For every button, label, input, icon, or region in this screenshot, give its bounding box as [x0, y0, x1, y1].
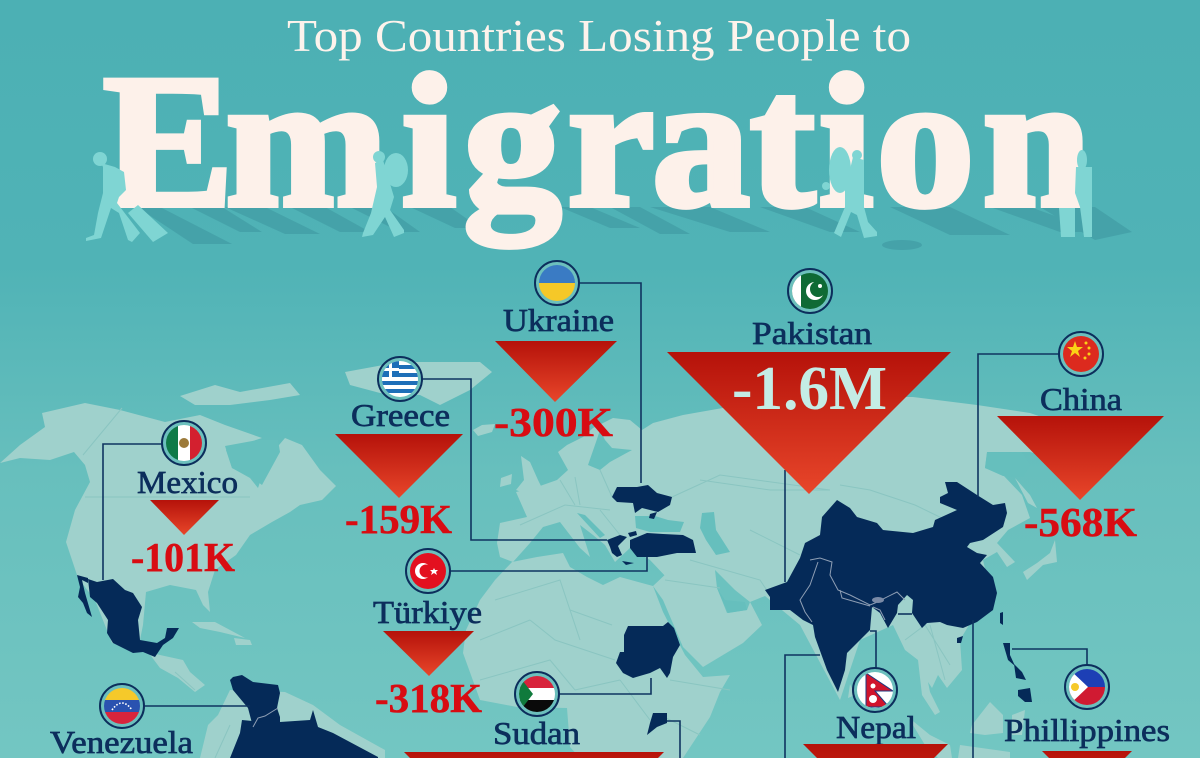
value: Ukraine: -300K: [494, 399, 613, 445]
traveller silhouette with child: [822, 147, 877, 238]
land: Arabia: [653, 570, 762, 667]
land: Eurasia: [497, 397, 1110, 715]
traveller silhouette standing with luggage: [1059, 150, 1092, 237]
value: Mexico: -101K: [131, 534, 235, 580]
flag: Pakistan: [788, 269, 832, 313]
flag: Greece: [378, 357, 422, 401]
land: Africa: [463, 553, 730, 758]
value: Greece: -159K: [345, 496, 452, 542]
label: Sudan: Sudan: [493, 715, 580, 751]
connector: Southeast China: [972, 620, 974, 758]
callout: Phillippines: [1004, 665, 1170, 758]
land: Caribbean and Central America: [148, 622, 252, 692]
connector: Mexico: [103, 444, 162, 580]
traveller silhouette with backpack: [362, 151, 408, 237]
label: Pakistan: Pakistan: [752, 315, 872, 351]
title shadows: [137, 207, 1132, 250]
label: Ukraine: Ukraine: [503, 302, 614, 338]
connector: Philippines: [1012, 649, 1087, 665]
land: Southeast Asia islands: [848, 684, 1025, 758]
value: Pakistan: -1.6M: [732, 355, 887, 423]
connector: Uganda: [667, 721, 680, 758]
label: Phillippines: Phillippines: [1004, 712, 1170, 748]
land: North America: [0, 403, 336, 650]
connector: Greece: [422, 379, 607, 540]
flag: Mexico: [162, 421, 206, 465]
connector: Bangladesh and Myanmar: [898, 613, 912, 615]
value: Türkiye: -318K: [375, 675, 482, 721]
flag: Phillippines: [1065, 665, 1109, 709]
flag: Türkiye: [406, 549, 450, 593]
connector: China: [978, 354, 1059, 497]
connector: Venezuela: [144, 705, 250, 707]
connector: India: [785, 655, 820, 758]
triangle: Mexico: [150, 500, 219, 535]
callout: Venezuela: [50, 684, 193, 758]
flag: Nepal: [853, 668, 897, 712]
Bhutan patch: [872, 597, 884, 603]
highlighted country: Greece: [607, 535, 634, 565]
land: Japan and Sakhalin: [1015, 478, 1057, 580]
label: Türkiye: Türkiye: [373, 594, 482, 630]
connector: Sudan: [559, 678, 651, 694]
triangle: Pakistan: [667, 352, 951, 494]
callout: Nepal: [803, 668, 948, 758]
connector: Türkiye: [450, 557, 647, 571]
triangle: Ukraine: [495, 341, 617, 402]
flag: Sudan: [515, 672, 559, 716]
triangle: Nepal: [803, 744, 948, 758]
label: China: China: [1040, 381, 1122, 417]
highlighted country: Ukraine: [612, 485, 672, 519]
highlighted country: Uganda: [647, 713, 667, 735]
callout: Greece: [335, 357, 463, 542]
borders inside South Asia: [800, 558, 905, 622]
triangle: Greece: [335, 434, 463, 498]
land: Arctic islands and Greenland: [180, 362, 492, 405]
label: Mexico: Mexico: [137, 464, 238, 500]
land: Iceland, UK, Ireland: [473, 424, 541, 493]
connector: Ukraine: [579, 283, 641, 483]
title: Emigration: Emigration: [103, 36, 1091, 247]
connector: Nepal: [870, 631, 876, 668]
flag: China: [1059, 332, 1103, 376]
title: subtitle line: Top Countries Losing People to: [287, 10, 911, 61]
highlighted country: Turkey: [628, 531, 696, 557]
traveller silhouette with suitcase: [86, 152, 168, 242]
callout: Mexico: [131, 421, 238, 580]
highlighted countries: China, India, Pakistan, Nepal: [765, 482, 1007, 692]
triangle: Phillippines: [1042, 751, 1132, 758]
callout: Ukraine: [494, 261, 617, 445]
highlighted country: Brazil and Guianas: [230, 710, 378, 758]
value: China: -568K: [1024, 499, 1137, 545]
highlighted country: Venezuela: [230, 675, 280, 727]
triangle: Sudan: [404, 752, 664, 758]
land: South America: [200, 690, 385, 758]
world map: [0, 362, 1110, 758]
seas over land: [225, 430, 1030, 613]
callout: Türkiye: [373, 549, 482, 721]
label: Greece: Greece: [351, 397, 450, 433]
flag: Venezuela: [100, 684, 144, 728]
border outline inside Venezuela: [253, 708, 278, 727]
triangle: Türkiye: [383, 631, 474, 676]
highlighted country: Sudan: [616, 622, 680, 678]
callout: Sudan: [404, 672, 664, 758]
triangle: China: [997, 416, 1164, 500]
highlighted country: Mexico: [77, 575, 179, 657]
label: Nepal: Nepal: [836, 709, 916, 745]
islands: Hainan, Taiwan, Philippines: [957, 612, 1032, 702]
callout: China: [997, 332, 1164, 545]
connector: Pakistan: [784, 470, 786, 582]
flag: Ukraine: [535, 261, 579, 305]
country borders: [83, 408, 983, 758]
callout: Pakistan: [667, 269, 951, 494]
